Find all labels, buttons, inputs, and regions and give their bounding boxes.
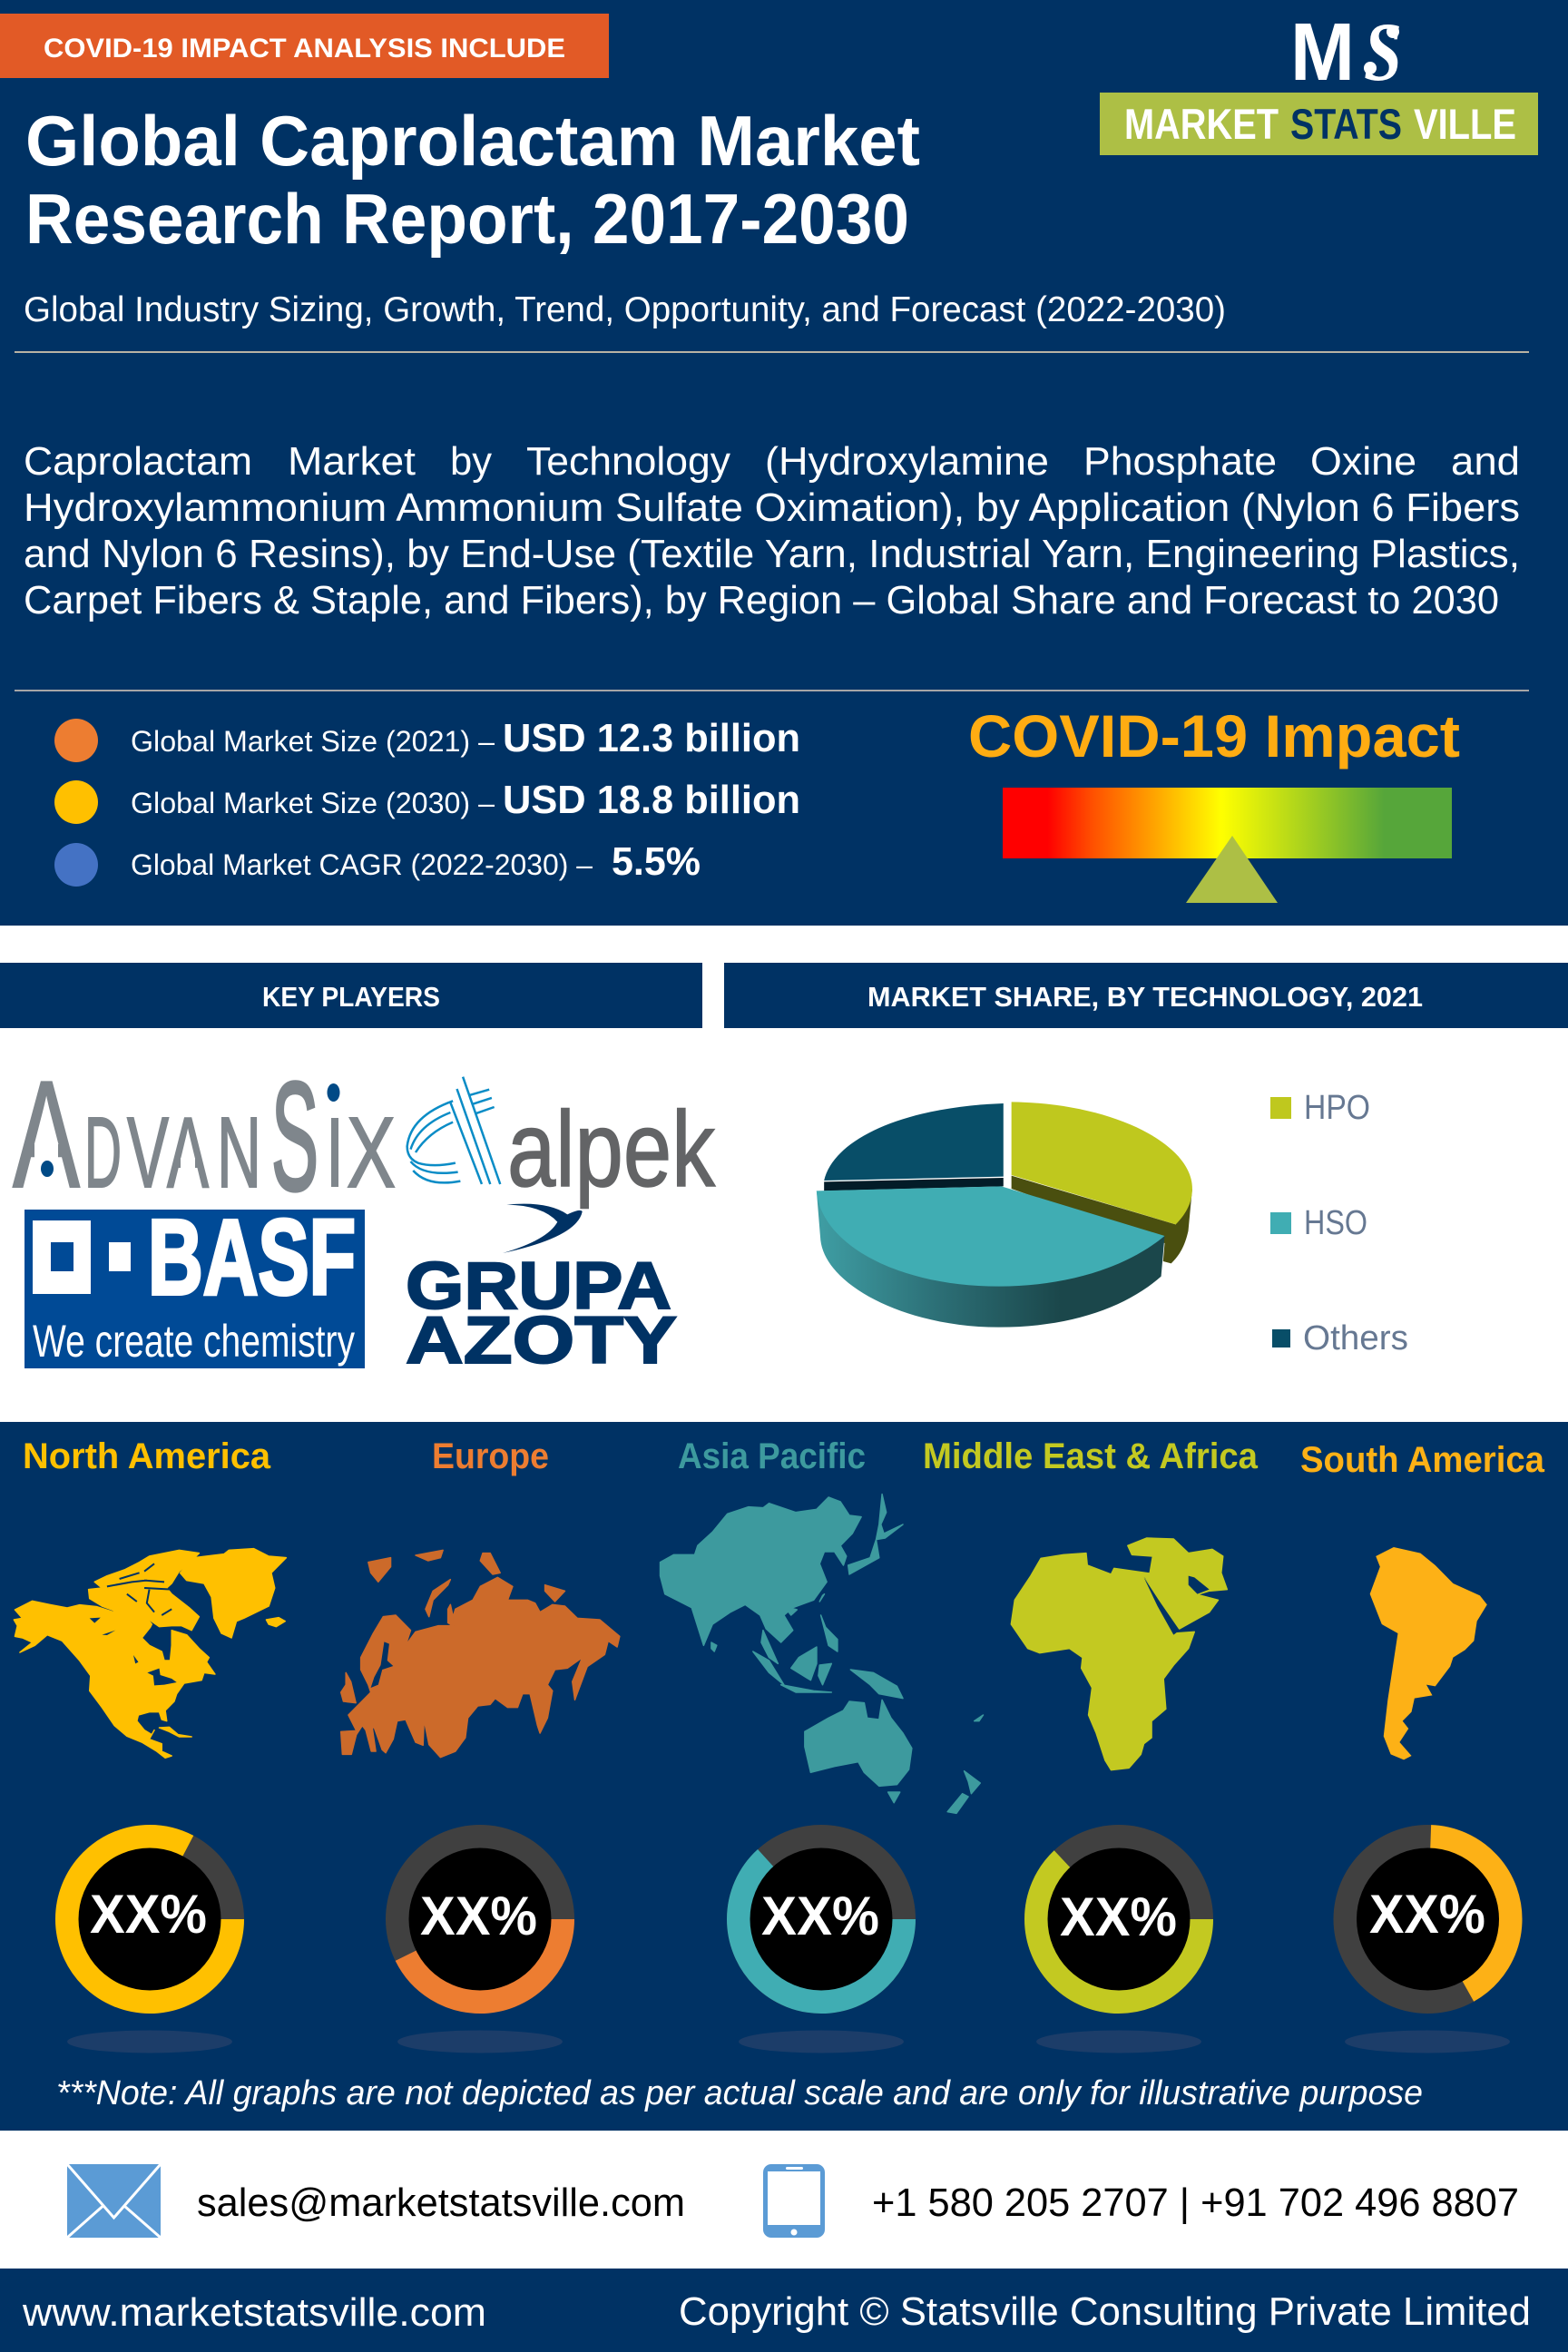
description paragraph: by bbox=[450, 439, 492, 484]
description paragraph: and Nylon 6 Resins), by End-Use (Textile Yarn, Industrial Yarn, Engineering Plastics, bbox=[24, 532, 1520, 576]
logo: BASF: We create chemistry bbox=[33, 1316, 355, 1367]
pie slice side: HSO bbox=[817, 1191, 1164, 1328]
donut: Asia Pacific bbox=[727, 1825, 916, 2053]
website: www.marketstatsville.com bbox=[22, 2290, 486, 2335]
region label: Middle East & Africa: Middle East & Africa bbox=[923, 1436, 1259, 1476]
logo: BASF: BASF bbox=[148, 1198, 356, 1318]
subtitle: Global Industry Sizing, Growth, Trend, Opportunity, and Forecast (2022-2030) bbox=[24, 290, 1226, 329]
description paragraph: and bbox=[1451, 439, 1520, 484]
title bbox=[25, 101, 920, 259]
pie slice: Others bbox=[824, 1103, 1004, 1181]
donut: Europe: XX% bbox=[420, 1886, 537, 1946]
logo mark: MS bbox=[1290, 5, 1402, 98]
logo: Grupa Azoty: GRUPA bbox=[406, 1250, 671, 1323]
market stat: size 2030 bbox=[54, 778, 800, 824]
logo wordmark: VILLE bbox=[1414, 100, 1516, 148]
description paragraph: Carpet Fibers & Staple, and Fibers), by Region – Global Share and Forecast to 2030 bbox=[24, 578, 1499, 622]
pie slice side: Others bbox=[824, 1178, 1004, 1191]
donut: South America: XX% bbox=[1369, 1884, 1485, 1945]
section header: market share bbox=[724, 963, 1568, 1028]
description paragraph: Hydroxylammonium Ammonium Sulfate Oximation), by Application (Nylon 6 Fibers bbox=[24, 485, 1520, 530]
logo: AdvanSix: N bbox=[217, 1097, 261, 1209]
icon: envelope bbox=[67, 2164, 161, 2238]
section header: market share: MARKET SHARE, BY TECHNOLOGY, 2021 bbox=[867, 981, 1423, 1013]
market stat: CAGR bbox=[54, 839, 701, 887]
market stat: size 2021 bbox=[54, 716, 800, 762]
legend: technology bbox=[1270, 1089, 1408, 1357]
logo: AdvanSix: A bbox=[13, 1049, 80, 1220]
legend: technology: HPO bbox=[1304, 1089, 1370, 1127]
legend: technology: Others bbox=[1303, 1319, 1408, 1357]
logo: Market Stats Ville bbox=[1100, 5, 1538, 155]
note: ***Note: All graphs are not depicted as per actual scale and are only for illustrative purpose bbox=[56, 2074, 1423, 2112]
map: North America bbox=[14, 1549, 286, 1758]
contact email: sales@marketstatsville.com bbox=[197, 2180, 685, 2225]
logo: BASF bbox=[24, 1198, 365, 1368]
region label: Europe: Europe bbox=[432, 1436, 549, 1476]
pie slice side: HPO bbox=[1012, 1176, 1192, 1263]
title: Research Report, 2017-2030 bbox=[25, 179, 909, 259]
logo: AdvanSix: D bbox=[84, 1097, 122, 1209]
section header: key players: KEY PLAYERS bbox=[262, 981, 440, 1013]
chart: 3D pie market share by technology bbox=[817, 1102, 1192, 1328]
logo: Alpek: alpek bbox=[507, 1090, 716, 1210]
logo: Grupa Azoty: AZOTY bbox=[406, 1304, 677, 1377]
logo: Alpek bbox=[407, 1077, 716, 1210]
market stat: CAGR: 5.5% bbox=[612, 839, 701, 884]
pie slice: HSO bbox=[817, 1186, 1164, 1287]
market stat: size 2030: USD 18.8 billion bbox=[503, 778, 800, 822]
description paragraph: (Hydroxylamine bbox=[765, 439, 1049, 484]
donut: Middle East and Africa: XX% bbox=[1060, 1886, 1177, 1947]
map: South America bbox=[1370, 1547, 1487, 1759]
panel: footer bbox=[0, 2269, 1568, 2352]
description paragraph: Phosphate bbox=[1083, 439, 1277, 484]
description paragraph bbox=[24, 439, 1520, 622]
logo: AdvanSix bbox=[13, 1049, 396, 1223]
pie slice: HPO bbox=[1012, 1102, 1192, 1224]
copyright: Copyright © Statsville Consulting Private Limited bbox=[679, 2289, 1531, 2334]
donut: North America: XX% bbox=[90, 1884, 207, 1945]
icon: Grupa Azoty swoosh bbox=[503, 1204, 583, 1253]
map: Europe and Russia bbox=[341, 1550, 620, 1758]
map: Middle East and Africa bbox=[1011, 1538, 1227, 1770]
panel: regions background bbox=[0, 1422, 1568, 2131]
donut: North America bbox=[55, 1825, 244, 2053]
contact phone numbers: +1 580 205 2707 | +91 702 496 8807 bbox=[872, 2180, 1519, 2225]
description paragraph: Market bbox=[288, 439, 416, 484]
title: Global Caprolactam Market bbox=[25, 101, 920, 181]
region label: North America: North America bbox=[23, 1436, 271, 1476]
region label: Asia Pacific: Asia Pacific bbox=[678, 1436, 866, 1476]
heading: COVID-19 Impact: COVID-19 Impact bbox=[968, 702, 1460, 769]
logo: AdvanSix: V bbox=[127, 1097, 169, 1209]
gauge: COVID-19 impact gradient bbox=[1003, 788, 1452, 903]
description paragraph: Technology bbox=[526, 439, 730, 484]
donut: Europe bbox=[386, 1825, 574, 2053]
logo: Grupa Azoty bbox=[406, 1204, 677, 1377]
logo wordmark bbox=[1100, 93, 1538, 155]
legend: technology: HSO bbox=[1304, 1204, 1367, 1242]
panel: header background bbox=[0, 0, 1568, 926]
region label: South America: South America bbox=[1300, 1440, 1545, 1480]
icon: gauge pointer bbox=[1186, 836, 1278, 903]
market stat: size 2021: Global Market Size (2021) – bbox=[131, 725, 495, 758]
market stat: CAGR: Global Market CAGR (2022-2030) – bbox=[131, 848, 593, 881]
icon: phone bbox=[763, 2164, 825, 2238]
market stat: size 2030: Global Market Size (2030) – bbox=[131, 787, 495, 819]
logo: AdvanSix: X bbox=[347, 1097, 396, 1209]
map: Asia Pacific bbox=[661, 1494, 984, 1813]
description paragraph: Caprolactam bbox=[24, 439, 252, 484]
donut: Middle East and Africa bbox=[1024, 1825, 1213, 2053]
icon: Alpek blue lines bbox=[407, 1077, 500, 1184]
logo: AdvanSix: A bbox=[167, 1097, 209, 1209]
donut: Asia Pacific: XX% bbox=[761, 1886, 879, 1946]
description paragraph: Oxine bbox=[1310, 439, 1416, 484]
section header: key players bbox=[0, 963, 702, 1028]
logo wordmark: STATS bbox=[1290, 100, 1402, 148]
logo: AdvanSix: S bbox=[271, 1051, 318, 1223]
banner: COVID-19 impact analysis bbox=[0, 14, 609, 78]
banner: COVID-19 impact analysis: COVID-19 IMPACT ANALYSIS INCLUDE bbox=[44, 34, 565, 64]
logo mark: MS: S bbox=[1364, 5, 1402, 98]
market stat: size 2021: USD 12.3 billion bbox=[503, 716, 800, 760]
donut: South America bbox=[1334, 1825, 1523, 2053]
logo mark: MS: M bbox=[1290, 7, 1355, 98]
logo wordmark: MARKET bbox=[1124, 100, 1279, 148]
